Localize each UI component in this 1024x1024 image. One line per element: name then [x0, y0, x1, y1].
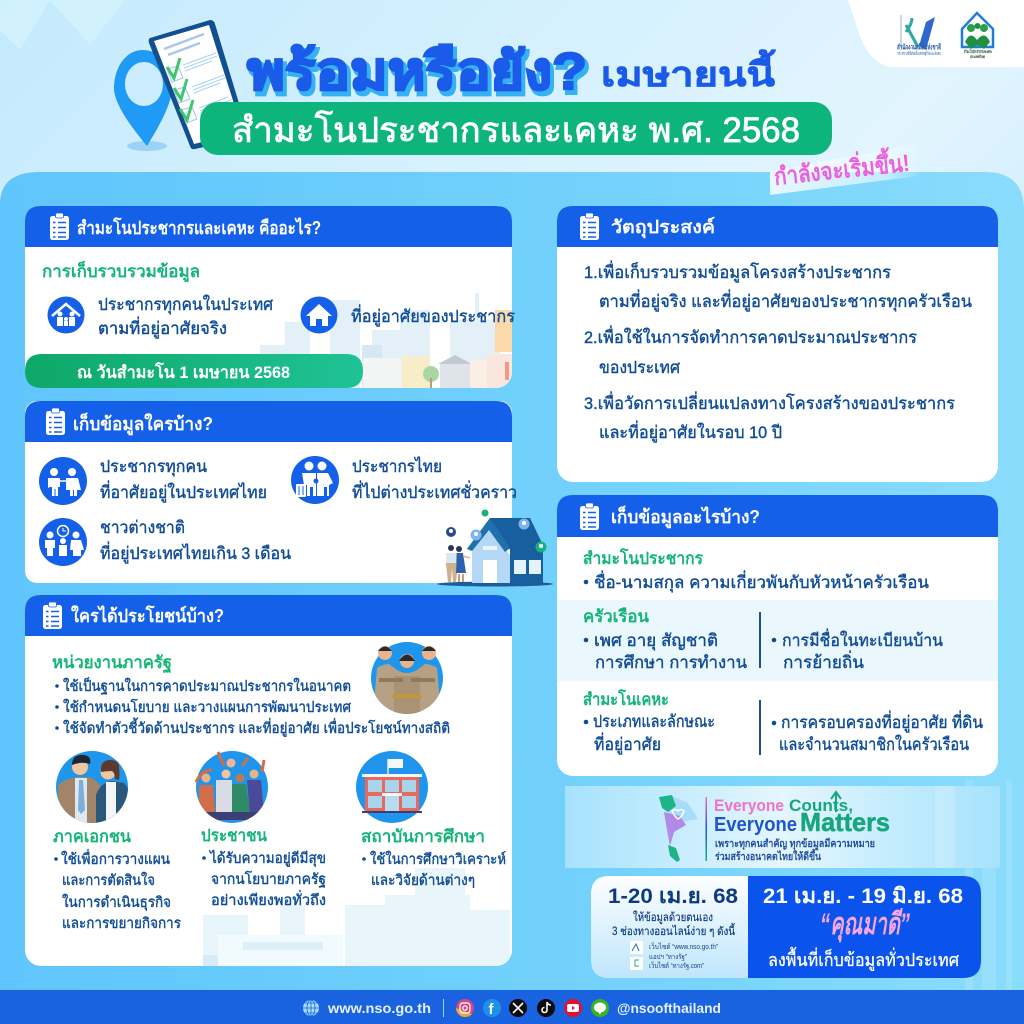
section: household: การมีชื่อในทะเบียนบ้าน [782, 628, 943, 650]
heading: เก็บข้อมูลใครบ้าง? [73, 412, 213, 436]
slogan: Matters [800, 807, 890, 837]
section: household: การศึกษา การทำงาน [595, 653, 747, 672]
panel: data collected [557, 495, 998, 776]
column: education: และวิจัยด้านต่างๆ [371, 872, 475, 889]
section: housing census: ที่อยู่อาศัย [594, 732, 661, 755]
section: housing census: สำมะโนเคหะ [583, 689, 669, 709]
column: citizens [201, 826, 326, 909]
section: housing census: และจำนวนสมาชิกในครัวเรือน [779, 734, 969, 754]
field period: “คุณมาดี” [820, 908, 910, 943]
icon: line [591, 999, 609, 1017]
icon: couple [39, 457, 87, 505]
icon: youtube [564, 999, 582, 1017]
section: population census: ชื่อ-นามสกุล ความเกี่ยวพันกับหัวหน้าครัวเรือน [594, 570, 929, 593]
self-report period: เว็บไซต์ “www.nso.go.th” [649, 942, 719, 951]
objectives list: ของประเทศ [599, 358, 680, 377]
ribbon background [770, 142, 925, 195]
icon: x [509, 999, 527, 1017]
self-report period: 3 ช่องทางออนไลน์ง่าย ๆ ดังนี้ [612, 923, 735, 938]
icon: facebook [483, 999, 501, 1018]
self-report period: 1-20 เม.ย. 68 [608, 885, 738, 908]
section: population census: สำมะโนประชากร [583, 548, 704, 568]
field period: ลงพื้นที่เก็บข้อมูลทั่วประเทศ [768, 947, 960, 971]
illustration: citizens crowd [196, 751, 268, 823]
text: everyone [98, 294, 273, 339]
government bullets [55, 676, 450, 737]
column: citizens: จากนโยบายภาครัฐ [211, 870, 326, 888]
section: household [583, 606, 943, 672]
icon: tiktok [537, 999, 555, 1017]
census date pill [25, 354, 363, 388]
decorative stripes [965, 780, 1012, 990]
icon: clipboard [580, 213, 599, 240]
column: citizens: ประชาชน [201, 826, 267, 845]
illustration: government officers [371, 642, 443, 714]
icon: instagram [456, 999, 474, 1017]
column: citizens: อย่างเพียงพอทั่วถึง [211, 890, 326, 909]
heading: สำมะโนประชากรและเคหะ คืออะไร? [77, 217, 321, 238]
city background [260, 293, 512, 388]
panel: who is counted [25, 401, 517, 583]
text: all population: ที่อาศัยอยู่ในประเทศไทย [100, 480, 267, 503]
column: education [361, 827, 506, 889]
field period: 21 เม.ย. - 19 มิ.ย. 68 [763, 885, 963, 908]
icon: house [300, 296, 338, 334]
slogan: Everyone [714, 814, 797, 836]
panel: what is the census [25, 206, 515, 388]
title: main heading: พร้อมหรือยัง? [247, 43, 587, 101]
column: private sector [53, 827, 181, 932]
objectives list: และที่อยู่อาศัยในรอบ 10 ปี [599, 420, 782, 443]
illustration: school building [356, 751, 428, 823]
logo: national statistical office: กระทรวงดิจิทัลเพื่อเศรษฐกิจและสังคม [897, 50, 941, 57]
self-report period [591, 876, 748, 978]
slogan: Counts, [789, 796, 853, 815]
icon: travellers [291, 456, 339, 504]
objectives list: 1.เพื่อเก็บรวบรวมข้อมูลโครงสร้างประชากร [584, 260, 891, 283]
slogan: ร่วมสร้างอนาคตไทยให้ดีขึ้น [715, 848, 822, 863]
logo: census house: สำมะโนประชากรและเคหะ [964, 48, 992, 54]
logo: national statistical office [897, 15, 941, 57]
slogan [714, 792, 890, 863]
section: housing census: ประเภทและลักษณะ [593, 712, 715, 731]
section: household: เพศ อายุ สัญชาติ [594, 631, 718, 651]
footer bar [0, 990, 1024, 1024]
subheading: government: หน่วยงานภาครัฐ [52, 653, 172, 674]
objectives list: 3.เพื่อวัดการเปลี่ยนแปลงทางโครงสร้างของประชากร [584, 391, 955, 413]
panel: objectives [557, 206, 998, 482]
logo: census house [962, 13, 993, 59]
heading: วัตถุประสงค์ [611, 216, 715, 239]
objectives list: ตามที่อยู่จริง และที่อยู่อาศัยของประชากรทุกครัวเรือน [599, 289, 972, 312]
column: citizens: ได้รับความอยู่ดีมีสุข [209, 849, 326, 867]
icon: thailand map [659, 795, 698, 862]
column: private sector: และการขยายกิจการ [62, 916, 181, 932]
text: housing: ที่อยู่อาศัยของประชากร [351, 304, 515, 327]
column: private sector: ภาคเอกชน [53, 827, 131, 846]
section: population census [583, 548, 929, 593]
column: private sector: และการตัดสินใจ [62, 871, 155, 889]
column: private sector: ใช้เพื่อการวางแผน [61, 849, 170, 868]
illustration: house and family [437, 510, 553, 586]
icon: clipboard [50, 213, 69, 240]
icon: clipboard [43, 602, 62, 629]
city background [203, 868, 510, 966]
government bullets: ใช้เป็นฐานในการคาดประมาณประชากรในอนาคต [63, 676, 351, 695]
text: all population: ประชากรทุกคน [100, 457, 207, 477]
section: housing census: การครอบครองที่อยู่อาศัย ที่ดิน [781, 710, 983, 733]
website: www.nso.go.th [327, 1000, 431, 1016]
text: everyone: ตามที่อยู่อาศัยจริง [98, 316, 227, 339]
census date pill: ณ วันสำมะโน 1 เมษายน 2568 [77, 362, 290, 382]
section: household: การย้ายถิ่น [783, 650, 864, 672]
heading: ใครได้ประโยชน์บ้าง? [71, 605, 224, 626]
text: foreigners: ชาวต่างชาติ [100, 518, 185, 537]
government bullets: ใช้กำหนดนโยบาย และวางแผนการพัฒนาประเทศ [63, 698, 352, 716]
section: housing census [583, 689, 983, 755]
text: all population [100, 457, 267, 503]
title: main heading: เมษายนนี้ [601, 49, 776, 94]
slogan: Everyone [714, 796, 784, 815]
campaign band [565, 786, 1000, 868]
objectives list [584, 260, 972, 443]
field period [748, 876, 981, 978]
self-report period: ให้ข้อมูลด้วยตนเอง [633, 911, 713, 924]
objectives list: 2.เพื่อใช้ในการจัดทำการคาดประมาณประชากร [584, 325, 917, 347]
ribbon tagline: กำลังจะเริ่มขึ้น! [772, 144, 911, 191]
logo: national statistical office: สำนักงานสถิติแห่งชาติ [897, 42, 941, 52]
icon: globe [303, 1000, 319, 1016]
text: everyone: ประชากรทุกคนในประเทศ [98, 294, 273, 315]
panel: who benefits [25, 595, 512, 966]
social handle: @nsoofthailand [617, 1000, 721, 1016]
text: foreigners [100, 518, 291, 564]
text: thai abroad [352, 456, 517, 502]
panel: schedule [591, 876, 981, 978]
heading: เก็บข้อมูลอะไรบ้าง? [611, 505, 760, 529]
icon: facebook: f [488, 1001, 494, 1018]
logo corner panel [848, 0, 1024, 67]
self-report period: เว็บไซต์ “ทางรัฐ.com” [649, 961, 705, 970]
column: private sector: ในการดำเนินธุรกิจ [62, 893, 171, 911]
illustration: private sector people [56, 751, 130, 827]
column: education: สถาบันการศึกษา [361, 827, 485, 846]
green title pill: สำมะโนประชากรและเคหะ พ.ศ. 2568 [232, 110, 800, 150]
icon: people in house [48, 296, 84, 334]
text: thai abroad: ประชากรไทย [352, 456, 442, 476]
self-report period: แอปฯ “ทางรัฐ” [649, 953, 688, 961]
green title pill [200, 102, 832, 155]
decorative triangle [0, 0, 125, 50]
slogan: เพราะทุกคนสำคัญ ทุกข้อมูลมีความหมาย [715, 837, 875, 851]
illustration: location pin and clipboard [114, 20, 248, 151]
subheading: การเก็บรวบรวมข้อมูล [42, 259, 200, 283]
icon: clipboard [46, 408, 65, 435]
logo: census house: ประเทศไทย [970, 53, 985, 59]
icon: clipboard [580, 503, 599, 530]
title: main heading: พร้อมหรือยัง? [250, 47, 590, 105]
government bullets: ใช้จัดทำตัวชี้วัดด้านประชากร และที่อยู่อาศัย เพื่อประโยชน์ทางสถิติ [63, 717, 450, 737]
column: education: ใช้ในการศึกษาวิเคราะห์ [370, 850, 506, 868]
text: foreigners: ที่อยู่ประเทศไทยเกิน 3 เดือน [100, 541, 291, 564]
text: thai abroad: ที่ไปต่างประเทศชั่วคราว [352, 480, 517, 502]
title: main heading [247, 43, 776, 105]
icon: family and clock [39, 518, 87, 566]
section: household: ครัวเรือน [583, 606, 649, 626]
